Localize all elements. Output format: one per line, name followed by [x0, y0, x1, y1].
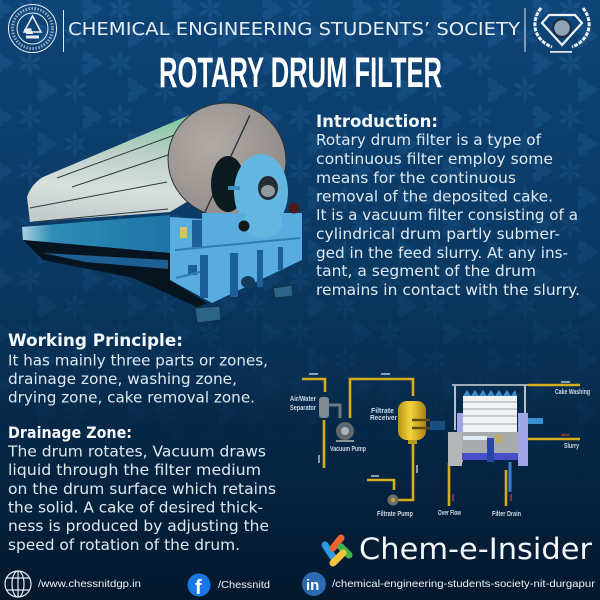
diagram labels: Separator: [290, 405, 316, 412]
diagram labels: Over Flow: [438, 510, 461, 517]
drum end face: [161, 95, 293, 225]
website link: /www.chessnitdgp.in: [38, 578, 141, 590]
diagram labels: Filtrate: [371, 406, 394, 415]
icon: linkedin: [302, 572, 326, 596]
diagram labels: Air/Water: [290, 396, 316, 403]
divider: [524, 8, 526, 52]
text block: drainage zone: on the drum surface which retains: [8, 480, 276, 498]
diagram labels: Filtrate Pump: [377, 511, 413, 518]
text block: introduction: continuous filter employ some: [316, 150, 553, 168]
text block: introduction: ged in the feed slurry. At any ins-: [316, 244, 568, 262]
illustration: rotary drum filter machine: [22, 95, 302, 323]
process flow diagram: [290, 374, 590, 518]
heading: drainage zone: Drainage Zone:: [8, 423, 132, 442]
text block: drainage zone: the solid. A cake of desired thick-: [8, 498, 263, 516]
text block: working principle: drying zone, cake removal zone.: [8, 388, 255, 406]
text block: working principle: It has mainly three parts or zones,: [8, 352, 268, 370]
heading: working principle: Working Principle:: [8, 331, 183, 351]
header: [8, 4, 589, 53]
text block: working principle: drainage zone, washing zone,: [8, 370, 237, 388]
yellow pipes: [302, 379, 580, 506]
linkedin link: /chemical-engineering-students-society-nit-durgapur: [332, 578, 596, 590]
text block: introduction: remains in contact with the slurry.: [316, 281, 580, 299]
text block: introduction: removal of the deposited cake.: [316, 188, 553, 206]
rotary filter schematic: [448, 385, 543, 492]
icon: globe: [5, 571, 31, 597]
icon: brand mark: [325, 538, 349, 563]
diagram labels: Slurry: [564, 443, 579, 450]
divider: [63, 10, 64, 52]
icon: linkedin: in: [306, 577, 319, 594]
text block: drainage zone: liquid through the filter medium: [8, 461, 261, 479]
frame: [170, 213, 302, 303]
connecting pipe: [430, 421, 445, 430]
icon: society logo: [8, 4, 56, 52]
text block: drainage zone: speed of rotation of the drum.: [8, 536, 240, 554]
flow markers: [309, 374, 570, 476]
filtrate receiver: [398, 401, 430, 444]
icon: institute emblem: [535, 8, 589, 53]
drum body: [27, 112, 197, 222]
text block: introduction: It is a vacuum filter consisting of a: [316, 206, 578, 224]
icon: facebook: [188, 574, 210, 599]
text block: drainage zone: ness is produced by adjusting the: [8, 517, 269, 535]
separator: [319, 397, 329, 418]
footer links: [5, 571, 596, 599]
icon: facebook: f: [195, 577, 202, 599]
text block: introduction: tant, a segment of the drum: [316, 262, 536, 280]
hub: [234, 154, 288, 230]
facebook link: /Chessnitd: [218, 579, 270, 591]
diagram labels: Receiver: [370, 413, 397, 422]
diagram labels: Filter Drain: [492, 511, 521, 518]
organisation name: CHEMICAL ENGINEERING STUDENTS’ SOCIETY: [68, 19, 521, 40]
text block: introduction: [316, 112, 580, 299]
text block: drainage zone: [7, 423, 276, 554]
diagram labels: [290, 389, 590, 518]
filtrate pump: [388, 494, 398, 506]
heading: introduction: Introduction:: [316, 112, 438, 131]
text block: working principle: [8, 331, 268, 406]
text block: introduction: means for the continuous: [316, 169, 516, 187]
feet: [195, 285, 293, 323]
text block: introduction: cylindrical drum partly submer-: [316, 225, 560, 243]
diagram labels: Vacuum Pump: [330, 446, 366, 453]
text block: drainage zone: The drum rotates, Vacuum draws: [7, 442, 266, 460]
brand name: Chem-e-Insider: [359, 532, 592, 566]
brand: Chem-e-Insider: [325, 532, 592, 566]
tank side: [22, 215, 170, 253]
text block: introduction: Rotary drum filter is a type of: [316, 131, 542, 149]
vacuum pump: [336, 422, 354, 442]
